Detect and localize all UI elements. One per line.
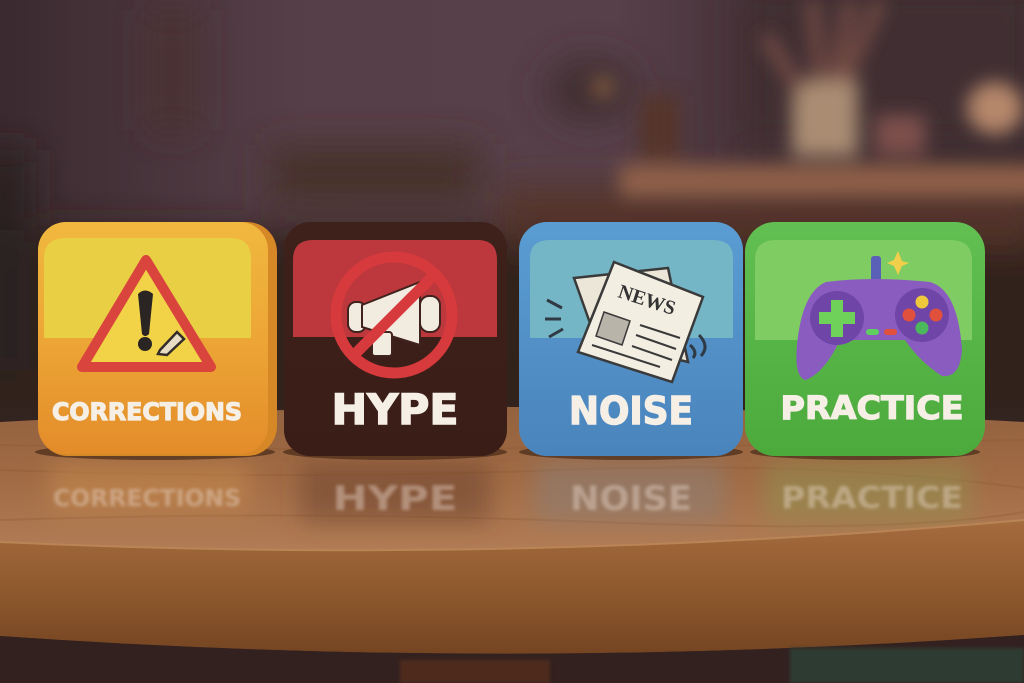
cube: practice <box>745 222 985 460</box>
icon: newspapers <box>545 262 705 382</box>
label: noise: NOISE <box>569 389 693 433</box>
cube reflections: HYPE <box>332 479 458 519</box>
cube: noise <box>519 222 743 460</box>
cube: corrections <box>35 222 277 460</box>
blurred room background <box>0 0 1024 440</box>
icon: crossed-out megaphone <box>336 257 452 373</box>
cube reflections: PRACTICE <box>781 481 963 516</box>
icon: warning triangle <box>82 260 211 367</box>
cube reflections: CORRECTIONS <box>53 486 241 512</box>
wooden table <box>0 407 1024 683</box>
label: corrections: CORRECTIONS <box>52 398 242 426</box>
cube reflections <box>53 479 963 519</box>
label: practice: PRACTICE <box>780 389 964 427</box>
icon: newspapers: NEWS <box>615 281 678 320</box>
icon: game controller <box>796 251 962 380</box>
colored reflections on table <box>50 462 970 522</box>
cube: hype <box>283 222 507 460</box>
label: hype: HYPE <box>332 385 458 434</box>
cube reflections: NOISE <box>570 479 692 519</box>
